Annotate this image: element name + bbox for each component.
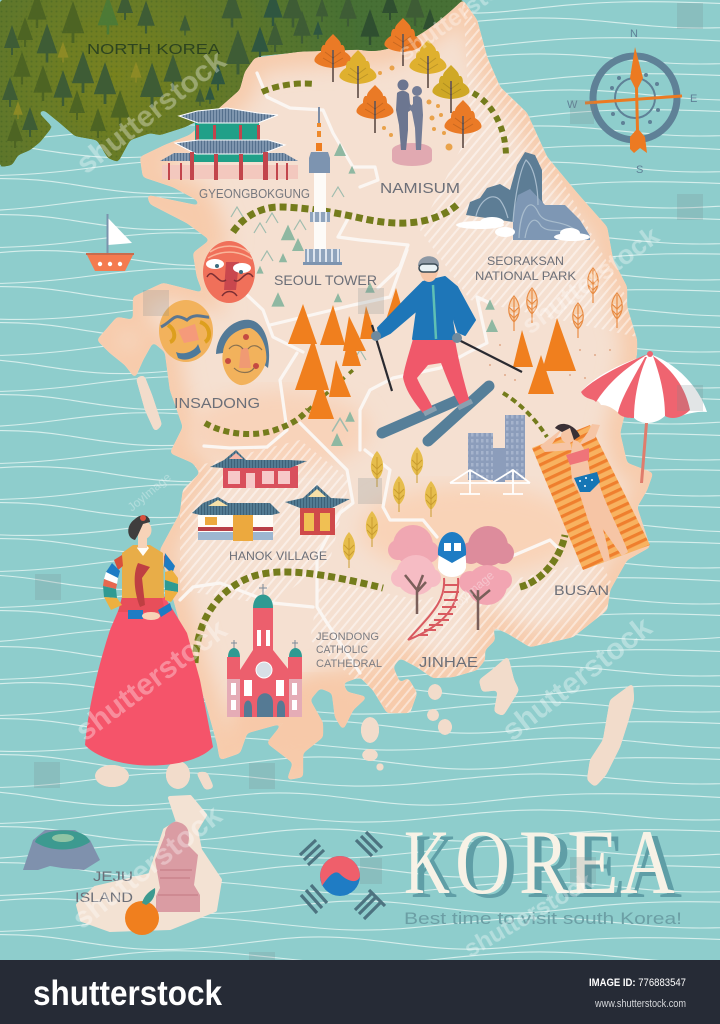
watermarks: shutterstock bbox=[69, 613, 233, 748]
hanok left bbox=[192, 497, 280, 541]
head bbox=[138, 535, 147, 548]
blossoms left bbox=[388, 525, 439, 565]
autumn trees: namisum bbox=[314, 18, 482, 150]
label: insadong: INSADONG bbox=[174, 395, 260, 412]
umbrella bbox=[581, 351, 707, 483]
label: jinhae: JINHAE bbox=[419, 654, 478, 671]
label: jeondong catholic cathedral bbox=[316, 631, 382, 670]
islands bbox=[95, 375, 634, 790]
island land bbox=[78, 797, 220, 930]
title letters bbox=[404, 811, 675, 913]
compass letters: E bbox=[690, 93, 697, 105]
blossoms right bbox=[460, 526, 514, 566]
mask: yellow left bbox=[159, 300, 213, 362]
panel: south korea land bbox=[97, 0, 653, 780]
hanok right bbox=[285, 485, 350, 535]
label: jeondong catholic cathedral: CATHOLIC bbox=[316, 644, 368, 656]
watermarks: shutterstock bbox=[496, 610, 658, 748]
man bbox=[396, 80, 414, 150]
left sleeve bbox=[103, 555, 123, 610]
label: hanok village: HANOK VILLAGE bbox=[229, 549, 327, 563]
jacket bbox=[122, 545, 164, 598]
title shadow: K bbox=[411, 815, 457, 917]
compass letters: S bbox=[636, 164, 643, 176]
city and bridge bbox=[450, 415, 530, 494]
compass bbox=[567, 28, 697, 176]
label: seoraksan national park bbox=[475, 254, 576, 283]
fallen leaves bbox=[378, 66, 452, 150]
label: jeju island: JEJU bbox=[93, 868, 133, 884]
jacket bbox=[378, 277, 475, 339]
footer bar bbox=[0, 960, 720, 1024]
compass letters bbox=[567, 28, 697, 176]
lower wings bbox=[162, 165, 298, 179]
title letters: O bbox=[455, 811, 510, 913]
watermarks: shutterstock bbox=[70, 43, 232, 181]
train bbox=[438, 532, 466, 577]
boots bbox=[424, 401, 472, 414]
title shadow: A bbox=[627, 815, 682, 917]
label: busan: BUSAN bbox=[554, 582, 609, 598]
label: jeju island: ISLAND bbox=[75, 889, 133, 905]
title shadow bbox=[411, 815, 682, 917]
label: jeondong catholic cathedral: JEONDONG bbox=[316, 631, 379, 643]
small hills bbox=[231, 143, 498, 446]
cathedral bbox=[227, 584, 302, 717]
tower: seoul tower bbox=[303, 107, 342, 265]
title letters: E bbox=[567, 811, 619, 913]
shutterstock logo: shutterstock bbox=[33, 974, 222, 1013]
skirt bbox=[85, 590, 213, 766]
subtitle: Best time to visit south Korea! bbox=[404, 909, 682, 928]
mask: yellow right bbox=[216, 320, 269, 385]
flag: taegeuk bbox=[300, 832, 385, 919]
middle roof bbox=[192, 154, 264, 162]
label: seoul tower: SEOUL TOWER bbox=[274, 272, 377, 288]
label: seoraksan national park: NATIONAL PARK bbox=[475, 269, 576, 283]
clouds bbox=[456, 217, 590, 241]
boat bbox=[86, 214, 134, 271]
gloves bbox=[371, 331, 462, 343]
watermarks bbox=[66, 0, 665, 963]
right sleeve bbox=[163, 553, 178, 602]
orange cones east bbox=[513, 318, 576, 394]
title letters: A bbox=[620, 811, 675, 913]
statue base bbox=[392, 143, 432, 166]
watermarks: shutterstock bbox=[460, 867, 598, 963]
label: seoraksan national park: SEORAKSAN bbox=[487, 254, 564, 268]
stone statue bbox=[155, 822, 200, 912]
watermarks: shutterstock bbox=[516, 220, 665, 340]
yellow trees bbox=[343, 447, 437, 568]
bikini bbox=[566, 448, 589, 465]
cuffs and hands bbox=[128, 610, 143, 619]
mat bbox=[532, 425, 650, 570]
masks: insadong bbox=[159, 241, 269, 385]
watermarks: JoyImage bbox=[125, 470, 174, 514]
label: north korea: NORTH KOREA bbox=[87, 41, 220, 58]
beach: sunbather on mat bbox=[532, 424, 650, 570]
upper hall bbox=[195, 122, 259, 140]
title bbox=[404, 811, 682, 917]
title shadow: O bbox=[462, 815, 517, 917]
label: jeju island bbox=[75, 868, 133, 905]
volcano bbox=[23, 830, 100, 870]
title shadow: R bbox=[526, 815, 577, 917]
title letters: R bbox=[519, 811, 570, 913]
forest firs bbox=[2, 0, 437, 148]
cherry trees bbox=[388, 525, 514, 630]
skis bbox=[382, 386, 489, 441]
orange outline trees bbox=[509, 268, 622, 338]
palace: gyeongbokgung bbox=[160, 108, 298, 180]
head bbox=[561, 429, 575, 443]
watermarks: JoyImage bbox=[448, 568, 497, 612]
tangerine bbox=[125, 901, 159, 935]
train and track bbox=[408, 532, 466, 640]
panel: north korea forest bbox=[0, 0, 465, 167]
stipple dots bbox=[489, 344, 611, 381]
orange cone trees bbox=[288, 288, 403, 419]
website: www.shutterstock.com bbox=[594, 998, 686, 1010]
dashed route lines bbox=[195, 83, 565, 663]
label: namisum: NAMISUM bbox=[380, 180, 460, 197]
mask: red bbox=[203, 241, 255, 303]
image id: IMAGE ID: 776883547 bbox=[589, 977, 686, 989]
woman bbox=[409, 86, 423, 150]
woman in hanbok bbox=[85, 515, 213, 766]
compass letters: N bbox=[630, 28, 638, 40]
statue: namisum couple bbox=[392, 80, 432, 166]
jeju island bbox=[23, 797, 220, 935]
title letters: K bbox=[404, 811, 450, 913]
mountain: seoraksan bbox=[456, 152, 590, 241]
watermarks: shutterstock bbox=[66, 798, 228, 936]
poles bbox=[372, 325, 522, 391]
title shadow: E bbox=[574, 815, 626, 917]
compass letters: W bbox=[567, 99, 578, 111]
hanok village bbox=[192, 450, 350, 541]
track bbox=[408, 578, 459, 640]
columns bbox=[168, 152, 288, 180]
pants bbox=[403, 339, 470, 413]
label: jeondong catholic cathedral: CATHEDRAL bbox=[316, 658, 382, 670]
hanok top bbox=[210, 450, 307, 488]
skier bbox=[371, 256, 522, 441]
head bbox=[420, 258, 438, 282]
trunks bbox=[405, 575, 490, 630]
region borders bbox=[180, 73, 562, 673]
woman body bbox=[540, 424, 628, 562]
label: gyeongbokgung: GYEONGBOKGUNG bbox=[199, 186, 310, 201]
